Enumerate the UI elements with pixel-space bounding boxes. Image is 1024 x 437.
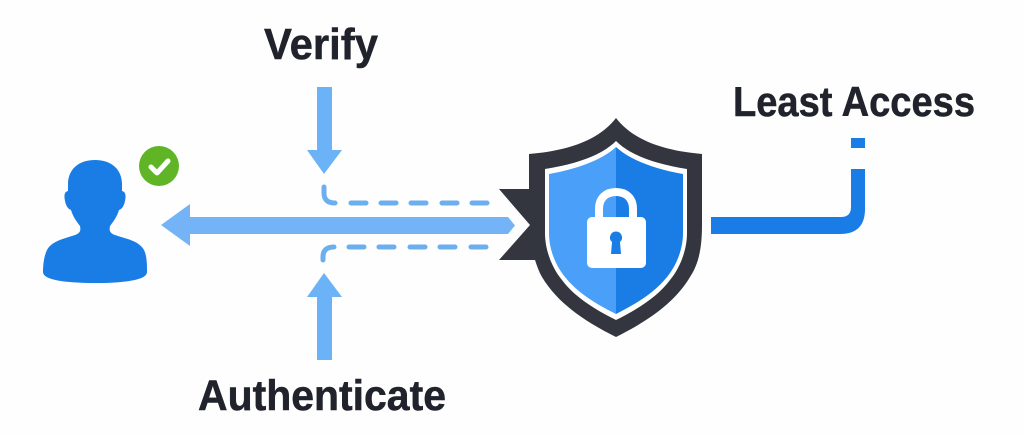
heading: Authenticate: Authenticate xyxy=(198,372,446,420)
icon: green check badge xyxy=(139,146,179,186)
dashed path: authenticate xyxy=(323,247,486,260)
icon: security shield with lock xyxy=(499,118,702,337)
shield right half xyxy=(616,147,683,314)
heading: Least Access: Least Access xyxy=(733,78,975,125)
arrow: verify down xyxy=(307,87,342,174)
shield left half xyxy=(549,147,616,314)
arrow: authenticate up xyxy=(307,273,342,360)
shield white border xyxy=(545,141,687,320)
heading: Verify: Verify xyxy=(264,20,378,69)
dashed path: verify xyxy=(324,187,487,203)
connector: shield to least access xyxy=(711,138,865,234)
shield outer frame xyxy=(499,118,702,337)
arrow: main flow from shield to user xyxy=(161,204,515,246)
padlock xyxy=(587,192,646,268)
icon: user silhouette xyxy=(43,160,147,283)
